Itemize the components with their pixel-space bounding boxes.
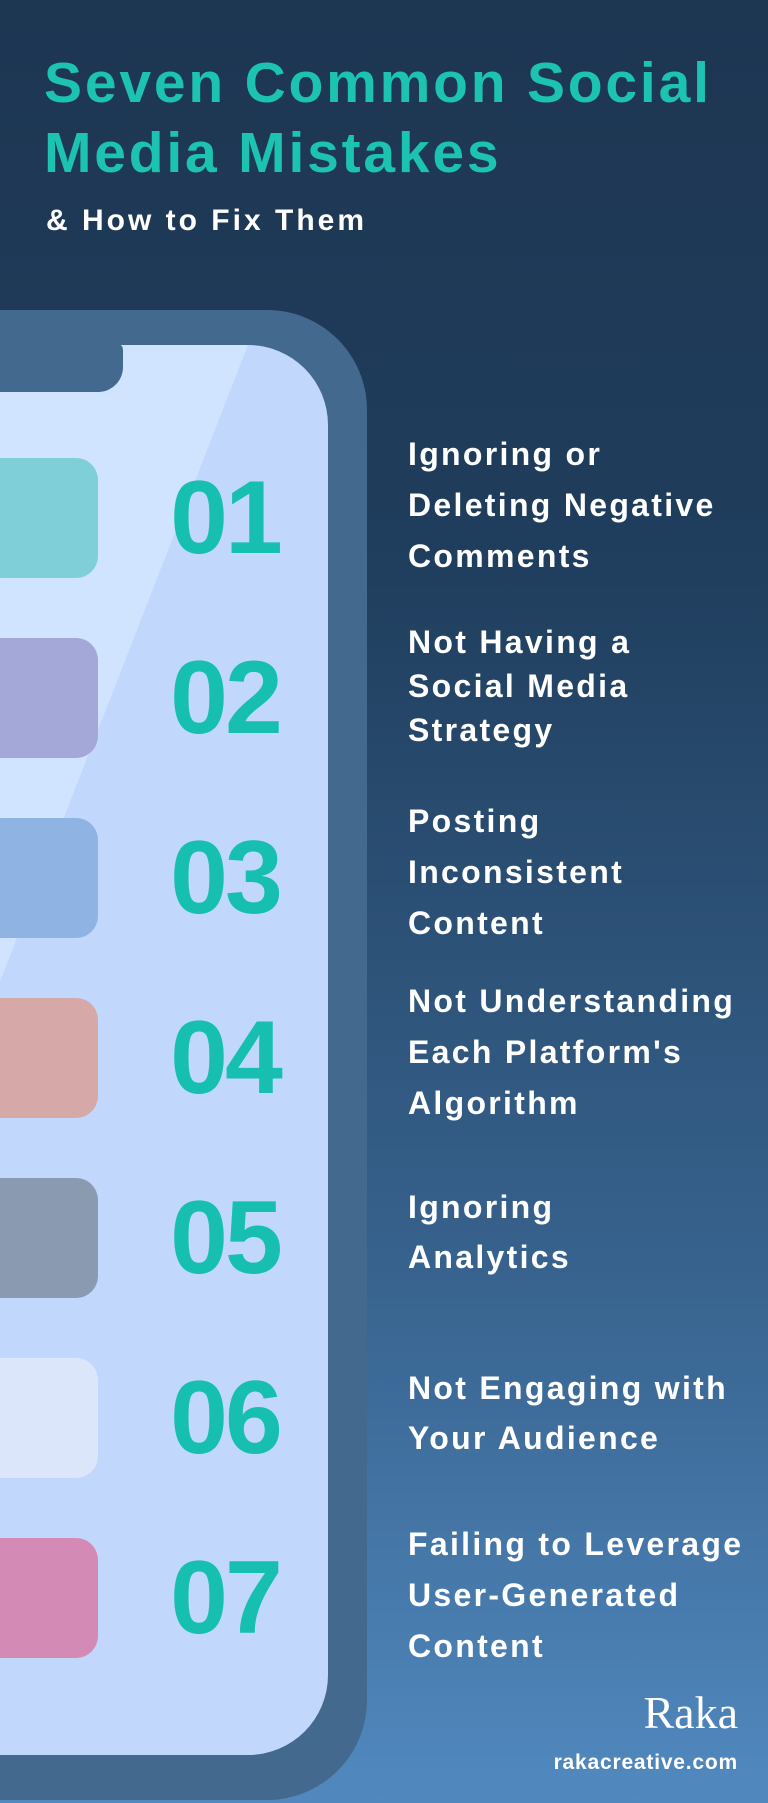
item 6 text: Your Audience (408, 1420, 660, 1456)
item 1 text: Deleting Negative (408, 487, 716, 523)
numbers: 02 (170, 640, 280, 756)
subtitle: & How to Fix Them (46, 204, 367, 237)
numbers: 03 (170, 820, 280, 936)
title: Media Mistakes (44, 121, 501, 185)
item 4 text: Not Understanding (408, 983, 735, 1019)
item 4 text (408, 983, 735, 1121)
item 2 text: Strategy (408, 712, 554, 748)
website url: rakacreative.com (554, 1751, 738, 1774)
item 2 text: Social Media (408, 668, 629, 704)
item 5 text: Analytics (408, 1239, 571, 1275)
item 3 text (408, 803, 624, 941)
item 5 text (408, 1189, 571, 1275)
title: Seven Common Social (44, 51, 712, 115)
item 3 text: Inconsistent (408, 854, 624, 890)
item 7 text (408, 1526, 743, 1664)
item 6 text: Not Engaging with (408, 1370, 728, 1406)
item 1 text: Ignoring or (408, 436, 602, 472)
item 6 text (408, 1370, 728, 1456)
numbers (170, 460, 282, 1656)
title (44, 51, 712, 185)
item 5 text: Ignoring (408, 1189, 554, 1225)
item 1 text: Comments (408, 538, 592, 574)
item 1 text (408, 436, 716, 574)
item 4 text: Each Platform's (408, 1034, 683, 1070)
logo: Raka (643, 1687, 738, 1738)
item boxes (0, 458, 98, 1658)
item 3 text: Posting (408, 803, 541, 839)
numbers: 01 (170, 460, 280, 576)
numbers: 05 (170, 1180, 280, 1296)
item 4 text: Algorithm (408, 1085, 580, 1121)
numbers: 07 (170, 1540, 280, 1656)
numbers: 06 (170, 1360, 280, 1476)
item 2 text: Not Having a (408, 624, 631, 660)
item 7 text: User-Generated (408, 1577, 680, 1613)
item 2 text (408, 624, 631, 748)
item 7 text: Content (408, 1628, 545, 1664)
item 3 text: Content (408, 905, 545, 941)
item 7 text: Failing to Leverage (408, 1526, 743, 1562)
numbers: 04 (170, 1000, 280, 1116)
